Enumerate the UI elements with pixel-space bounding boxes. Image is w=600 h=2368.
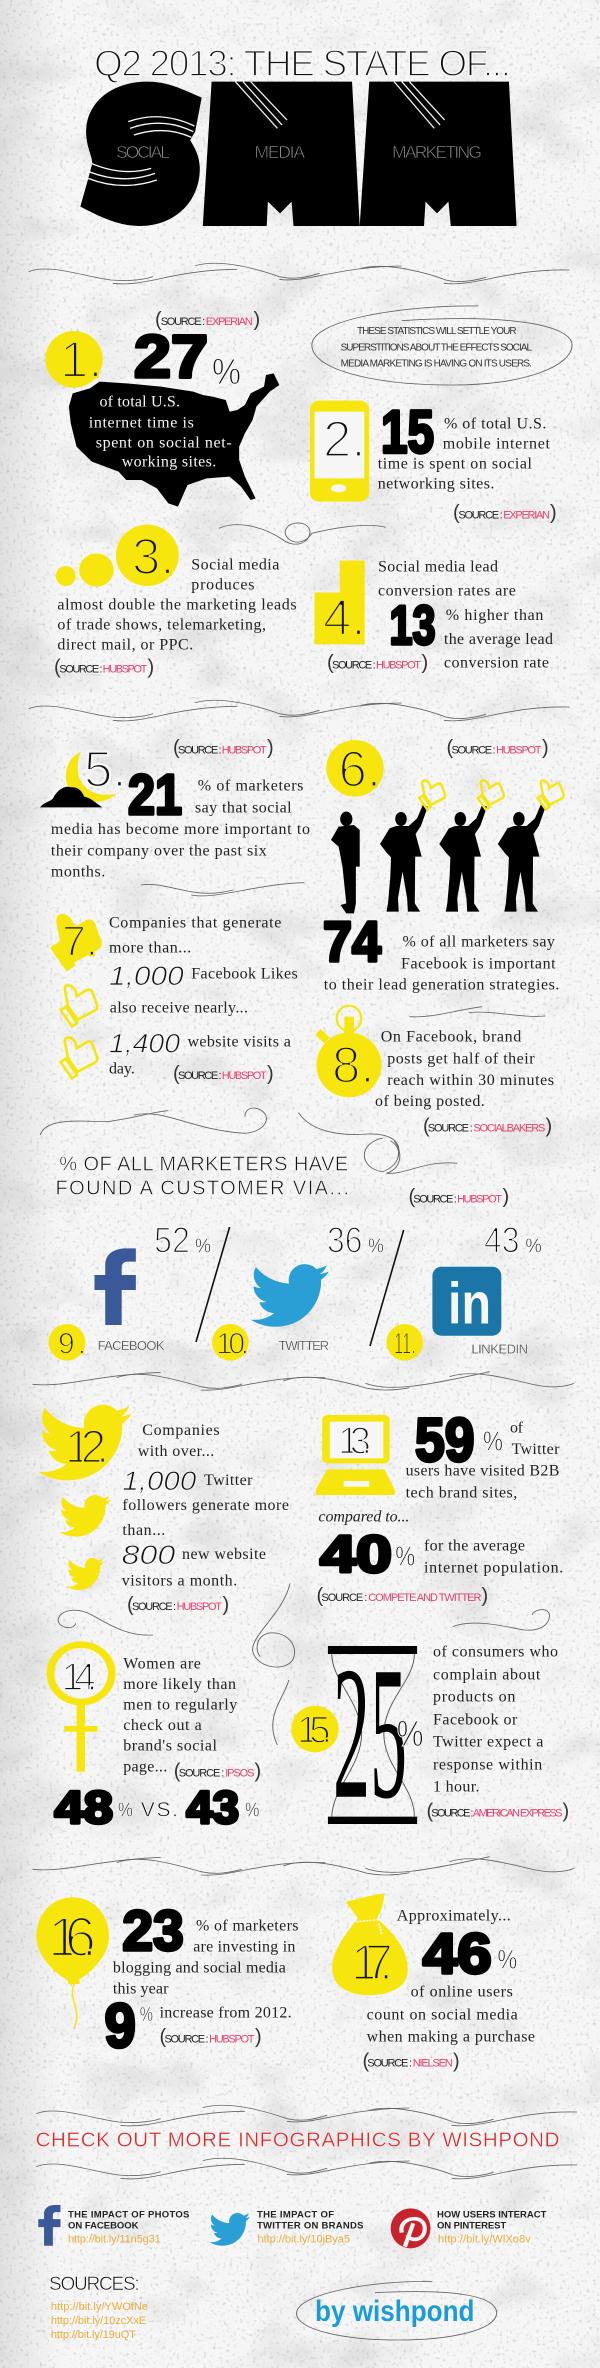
number 14: 14. xyxy=(62,1656,98,1699)
source: ( xyxy=(54,656,61,678)
sources links xyxy=(51,2301,148,2341)
stat 15 xyxy=(291,1629,569,1839)
number 16: 16. xyxy=(48,1905,97,1968)
source: ( xyxy=(173,737,180,759)
value 36: 36 xyxy=(327,1219,362,1260)
body text: more than... xyxy=(109,939,191,956)
icon: facebook xyxy=(38,2205,60,2246)
heading: FOUND A CUSTOMER VIA... xyxy=(56,1177,349,1199)
value 74: 74 xyxy=(323,910,381,974)
body text: also receive nearly... xyxy=(110,1000,248,1017)
source xyxy=(127,1594,229,1616)
body text: 1,000 xyxy=(122,1466,196,1496)
body text: 1,400 xyxy=(109,1029,180,1059)
body text: the average lead xyxy=(444,631,553,648)
body text: reach within 30 minutes xyxy=(387,1072,554,1089)
item: facebook xyxy=(38,2205,189,2246)
icon: yellow circle xyxy=(326,740,384,797)
body text: products on xyxy=(433,1689,515,1706)
body text: increase from 2012. xyxy=(160,2005,292,2022)
item text xyxy=(68,2209,189,2245)
source: ( xyxy=(426,1800,434,1822)
stat 6 xyxy=(323,737,567,993)
body text: conversion rate xyxy=(444,655,549,672)
value 13: 13 xyxy=(390,594,436,656)
source: ( xyxy=(423,1116,430,1138)
body text: internet population. xyxy=(424,1559,563,1576)
body text: are investing in xyxy=(193,1939,295,1956)
number 13: 13. xyxy=(338,1420,372,1462)
icon: hourglass xyxy=(328,1646,417,1824)
source: ) xyxy=(482,1585,488,1607)
column: twitter: 10. xyxy=(216,1327,249,1360)
label: TWITTER xyxy=(279,1338,329,1353)
source: ) xyxy=(267,1063,274,1085)
item text: TWITTER ON BRANDS xyxy=(257,2220,364,2231)
section: customer via xyxy=(49,1154,542,1361)
title line: Q2 2013: THE STATE OF... xyxy=(94,43,511,84)
people silhouettes xyxy=(331,805,546,913)
body text: working sites. xyxy=(122,454,216,471)
number 4: 4. xyxy=(323,589,366,646)
body text: Twitter xyxy=(204,1472,253,1489)
comparison: % xyxy=(245,1800,260,1822)
stat 2: phone xyxy=(310,398,557,524)
body text: of consumers who xyxy=(433,1644,558,1661)
source: ( xyxy=(173,1063,180,1085)
source xyxy=(423,1116,552,1138)
source xyxy=(408,1186,509,1208)
value 27: 27 xyxy=(134,323,208,390)
source xyxy=(54,656,154,678)
icon: yellow circle xyxy=(291,1706,339,1752)
body text xyxy=(51,778,310,881)
source: ( xyxy=(446,737,454,759)
number 2: 2. xyxy=(323,411,366,468)
icon: money bag xyxy=(332,1893,408,1995)
body text: % of all marketers say xyxy=(402,934,555,951)
body text xyxy=(109,914,298,1077)
percent: % xyxy=(195,1235,211,1257)
stat 16 xyxy=(36,1897,299,2061)
percent: % xyxy=(368,1235,384,1257)
body text: % of marketers xyxy=(198,778,303,795)
related infographics xyxy=(38,2205,547,2248)
stat 4 xyxy=(315,559,553,674)
body text: Social media xyxy=(191,556,279,573)
source xyxy=(327,652,428,674)
SMM logo xyxy=(80,82,517,226)
call to action: CHECK OUT MORE INFOGRAPHICS BY WISHPOND xyxy=(36,2129,559,2152)
item text: ON FACEBOOK xyxy=(68,2220,139,2231)
icon: laptop xyxy=(316,1415,395,1495)
source: SOURCE : AMERICAN EXPRESS xyxy=(431,1808,562,1820)
body text: of total U.S. xyxy=(100,394,180,411)
source: ) xyxy=(453,2050,460,2072)
icon: moon and cloud xyxy=(40,752,117,807)
source: ( xyxy=(362,2050,370,2072)
source: SOURCE : HUBSPOT xyxy=(164,2033,255,2045)
body text xyxy=(375,1029,554,1110)
oval text: MEDIA MARKETING IS HAVING ON ITS USERS. xyxy=(341,358,532,369)
body text: networking sites. xyxy=(378,475,494,492)
body text: complain about xyxy=(433,1666,541,1683)
source xyxy=(173,737,274,759)
source: ( xyxy=(327,652,334,674)
sources links: http://bit.ly/10zcXxE xyxy=(51,2315,146,2327)
body text: time is spent on social xyxy=(378,455,533,472)
icons: small birds xyxy=(59,1495,111,1590)
value 40: 40 xyxy=(320,1526,392,1584)
body text: of being posted. xyxy=(375,1093,485,1110)
body text: count on social media xyxy=(367,2006,518,2023)
section flourish xyxy=(40,1108,457,1173)
number 1: 1. xyxy=(60,331,103,388)
stat 7 xyxy=(40,903,298,1085)
icon: pinterest xyxy=(391,2208,430,2248)
value 21: 21 xyxy=(128,763,182,827)
sources links: http://bit.ly/19uQT xyxy=(51,2329,136,2341)
body text: compared to... xyxy=(318,1509,409,1526)
divider slash xyxy=(196,1227,230,1342)
item text: http://bit.ly/11n5g31 xyxy=(68,2233,161,2245)
body text xyxy=(113,1918,299,1997)
icon: three dots xyxy=(56,525,179,587)
number 12: 12. xyxy=(65,1421,109,1473)
word: marketing: MARKETING xyxy=(392,142,482,162)
source: SOURCE : HUBSPOT xyxy=(132,1601,222,1613)
icon: bar shape xyxy=(315,561,365,644)
body text: of trade shows, telemarketing, xyxy=(57,616,266,633)
source xyxy=(160,2026,262,2048)
word: media: MEDIA xyxy=(254,142,305,162)
stat 17 xyxy=(332,1893,535,2072)
source: ( xyxy=(160,2026,166,2048)
oval text xyxy=(341,326,532,369)
source: ) xyxy=(254,1760,261,1782)
percent: % xyxy=(525,1235,542,1257)
body text: months. xyxy=(51,864,105,881)
body text: Women are xyxy=(123,1655,201,1672)
icon: twitter xyxy=(251,1264,329,1327)
body text: men to regularly xyxy=(123,1696,237,1713)
item text: ON PINTEREST xyxy=(437,2220,506,2231)
number 17: 17. xyxy=(351,1934,393,1990)
source: SOURCE : HUBSPOT xyxy=(332,659,421,671)
body text: day. xyxy=(109,1060,135,1077)
comparison xyxy=(55,1782,260,1833)
value 9: 9 xyxy=(104,1992,136,2061)
comparison: VS. xyxy=(141,1799,178,1822)
body text: of xyxy=(510,1419,524,1436)
number 9 xyxy=(49,1324,85,1361)
item: pinterest xyxy=(391,2208,547,2248)
body text: Approximately... xyxy=(397,1908,511,1925)
value 25: 25 xyxy=(333,1629,407,1839)
percent: % xyxy=(395,1541,415,1572)
column: facebook xyxy=(49,1219,211,1361)
body text: Twitter expect a xyxy=(433,1734,543,1751)
body text: media has become more important to xyxy=(51,821,310,838)
body text: followers generate more xyxy=(122,1497,289,1514)
body text: Companies that generate xyxy=(109,914,281,931)
number 11 xyxy=(386,1324,423,1361)
source: ( xyxy=(408,1186,416,1208)
comparison: 48 xyxy=(55,1782,113,1833)
logo text: by wishpond xyxy=(315,2295,474,2328)
source: SOURCE : EXPERIAN xyxy=(161,316,253,328)
percent: % xyxy=(140,2004,153,2026)
body text: % of marketers xyxy=(196,1918,298,1935)
icon: linkedin xyxy=(432,1267,501,1336)
comparison: 43 xyxy=(186,1782,239,1833)
source: ) xyxy=(422,652,428,674)
value 23: 23 xyxy=(122,1899,184,1963)
item text: HOW USERS INTERACT xyxy=(437,2209,547,2220)
body text: this year xyxy=(113,1980,169,1997)
body text xyxy=(424,1538,563,1576)
source: ) xyxy=(546,1116,552,1138)
column: facebook: 9. xyxy=(58,1327,86,1360)
body text: Social media lead xyxy=(378,559,498,576)
item text: http://bit.ly/10jBya5 xyxy=(258,2233,350,2245)
item text: THE IMPACT OF PHOTOS xyxy=(68,2209,189,2220)
source: ) xyxy=(267,737,274,759)
body text: produces xyxy=(191,576,254,593)
source: SOURCE : HUBSPOT xyxy=(452,744,542,756)
number 15: 15. xyxy=(297,1710,332,1752)
number 10 xyxy=(212,1324,249,1361)
source: ( xyxy=(453,502,460,524)
source xyxy=(316,1585,488,1607)
body text: page... xyxy=(123,1759,167,1776)
body text: Facebook Likes xyxy=(191,966,298,983)
item: twitter xyxy=(209,2209,364,2246)
body text: say that social xyxy=(195,799,292,816)
icon: balloon xyxy=(36,1897,109,2027)
source: SOURCE : HUBSPOT xyxy=(178,744,267,756)
column: linkedin: 11. xyxy=(394,1327,416,1360)
body text: to their lead generation strategies. xyxy=(324,976,559,993)
stat 13 xyxy=(316,1406,563,1607)
wishpond logo xyxy=(297,2282,497,2340)
body text: % of total U.S. xyxy=(444,415,546,432)
flourish xyxy=(219,523,386,544)
callout: intro oval xyxy=(312,306,572,385)
body text: Facebook or xyxy=(433,1711,518,1728)
body text xyxy=(378,559,553,672)
body text: than... xyxy=(122,1522,165,1539)
source: SOURCE : HUBSPOT xyxy=(59,664,148,676)
oval text: SUPERSTITIONS ABOUT THE EFFECTS SOCIAL xyxy=(341,342,532,353)
percent: % xyxy=(483,1426,503,1457)
source: ) xyxy=(148,656,154,678)
source: ( xyxy=(127,1594,134,1616)
body text: Companies xyxy=(142,1422,220,1439)
body text: conversion rates are xyxy=(378,583,516,600)
body text: 1 hour. xyxy=(433,1779,480,1796)
sources heading: SOURCES: xyxy=(49,2274,140,2295)
source: ) xyxy=(222,1594,229,1616)
source: ( xyxy=(174,1760,181,1782)
source: SOURCE : SOCIALBAKERS xyxy=(428,1123,545,1135)
small flourishes xyxy=(141,883,545,1017)
body text: internet time is xyxy=(89,414,194,431)
icon: solid thumb xyxy=(40,903,107,970)
value 52: 52 xyxy=(154,1219,190,1260)
body text: when making a purchase xyxy=(367,2029,535,2046)
percent: % xyxy=(497,1944,517,1974)
icons: outline thumbs xyxy=(51,976,102,1079)
body text: direct mail, or PPC. xyxy=(57,636,193,653)
icon: facebook xyxy=(95,1248,136,1325)
body text xyxy=(57,556,297,653)
flourishes xyxy=(58,1583,549,1745)
icon: venus symbol xyxy=(51,1645,112,1772)
value 59: 59 xyxy=(415,1406,474,1474)
body text: almost double the marketing leads xyxy=(57,596,297,613)
body text xyxy=(123,1655,237,1776)
source xyxy=(453,502,557,524)
stat 8 xyxy=(315,1006,554,1138)
source: ) xyxy=(254,309,260,331)
body text: % higher than xyxy=(446,607,543,624)
icon: stopwatch xyxy=(315,1006,382,1097)
comparison: % xyxy=(118,1800,133,1822)
heading xyxy=(56,1154,349,1199)
stat 14 xyxy=(51,1645,261,1833)
body text xyxy=(367,1984,535,2046)
body text: their company over the past six xyxy=(51,843,267,860)
body text: posts get half of their xyxy=(387,1050,535,1067)
source xyxy=(426,1800,569,1822)
sources links: http://bit.ly/YWOfNe xyxy=(51,2301,148,2313)
body text: 1,000 xyxy=(109,961,184,991)
divider slash xyxy=(370,1230,404,1346)
item text xyxy=(437,2209,547,2245)
value 46: 46 xyxy=(423,1922,492,1986)
column: twitter xyxy=(212,1219,384,1361)
body text xyxy=(318,1419,560,1526)
word: social: SOCIAL xyxy=(116,142,170,162)
item text: THE IMPACT OF xyxy=(257,2209,334,2220)
body text: with over... xyxy=(138,1443,214,1460)
body text: mobile internet xyxy=(443,435,551,452)
body text: check out a xyxy=(123,1717,202,1734)
source: ) xyxy=(550,502,557,524)
source: ) xyxy=(562,1800,569,1822)
sources xyxy=(49,2274,148,2341)
number 5: 5. xyxy=(84,741,127,798)
body text: blogging and social media xyxy=(113,1960,286,1977)
source: SOURCE : HUBSPOT xyxy=(413,1193,502,1205)
body text xyxy=(89,394,232,471)
source xyxy=(446,737,549,759)
column: linkedin xyxy=(386,1219,542,1361)
body text: of online users xyxy=(411,1984,513,2001)
stat 3 xyxy=(54,525,297,678)
icon: large bird xyxy=(38,1405,132,1480)
body text: Twitter xyxy=(512,1441,560,1458)
source: ( xyxy=(155,309,162,331)
heading: % OF ALL MARKETERS HAVE xyxy=(59,1154,348,1176)
stat 5 xyxy=(40,737,310,881)
oval sketch xyxy=(312,306,572,385)
source: SOURCE : HUBSPOT xyxy=(178,1070,267,1082)
body text xyxy=(378,415,551,492)
body text: response within xyxy=(433,1756,542,1773)
source: SOURCE : EXPERIAN xyxy=(458,509,550,521)
body text xyxy=(324,934,559,993)
number 6: 6. xyxy=(338,741,381,798)
oval text: THESE STATISTICS WILL SETTLE YOUR xyxy=(357,326,517,337)
body text: 800 xyxy=(122,1540,175,1570)
source: ( xyxy=(316,1585,324,1607)
number 8: 8. xyxy=(332,1037,375,1094)
source: SOURCE : NIELSEN xyxy=(367,2058,453,2070)
number 3: 3. xyxy=(132,528,175,585)
header xyxy=(80,43,517,226)
icon: yellow circle xyxy=(45,331,103,388)
item text: http://bit.ly/WlXo8v xyxy=(438,2233,531,2245)
label: FACEBOOK xyxy=(98,1338,165,1353)
icon: linkedin: in xyxy=(448,1271,491,1336)
source xyxy=(155,309,260,331)
value 15: 15 xyxy=(381,398,434,466)
body text: more likely than xyxy=(123,1676,236,1693)
body text: new website xyxy=(182,1546,266,1563)
body text: for the average xyxy=(424,1538,525,1555)
label: LINKEDIN xyxy=(471,1341,528,1356)
body text: tech brand sites, xyxy=(406,1484,517,1501)
item text xyxy=(257,2209,364,2245)
thumbs raised xyxy=(412,773,567,810)
stat 12 xyxy=(38,1405,289,1616)
body text: On Facebook, brand xyxy=(381,1029,521,1046)
logo oval xyxy=(297,2282,497,2340)
body text xyxy=(433,1644,558,1796)
source: ) xyxy=(502,1186,509,1208)
source: SOURCE : IPSOS xyxy=(179,1768,254,1780)
source: SOURCE : COMPETE AND TWITTER xyxy=(321,1592,481,1604)
value 43: 43 xyxy=(484,1219,520,1260)
source: ) xyxy=(255,2026,262,2048)
percent: % xyxy=(397,1713,424,1754)
body text: brand's social xyxy=(123,1738,218,1755)
body text: visitors a month. xyxy=(122,1573,237,1590)
source xyxy=(362,2050,460,2072)
body text: Facebook is important xyxy=(401,955,556,972)
body text: website visits a xyxy=(188,1034,291,1051)
icon: US map xyxy=(69,373,279,507)
percent: % xyxy=(212,351,241,392)
body text: users have visited B2B xyxy=(406,1463,559,1480)
source: ) xyxy=(542,737,549,759)
icon: twitter xyxy=(209,2213,250,2246)
source xyxy=(173,1063,274,1085)
stat 1: US map xyxy=(45,309,279,507)
body text: spent on social net- xyxy=(96,434,232,451)
number 7: 7. xyxy=(62,918,98,966)
icon: phone xyxy=(310,401,369,502)
source xyxy=(174,1760,261,1782)
body text xyxy=(122,1422,289,1590)
